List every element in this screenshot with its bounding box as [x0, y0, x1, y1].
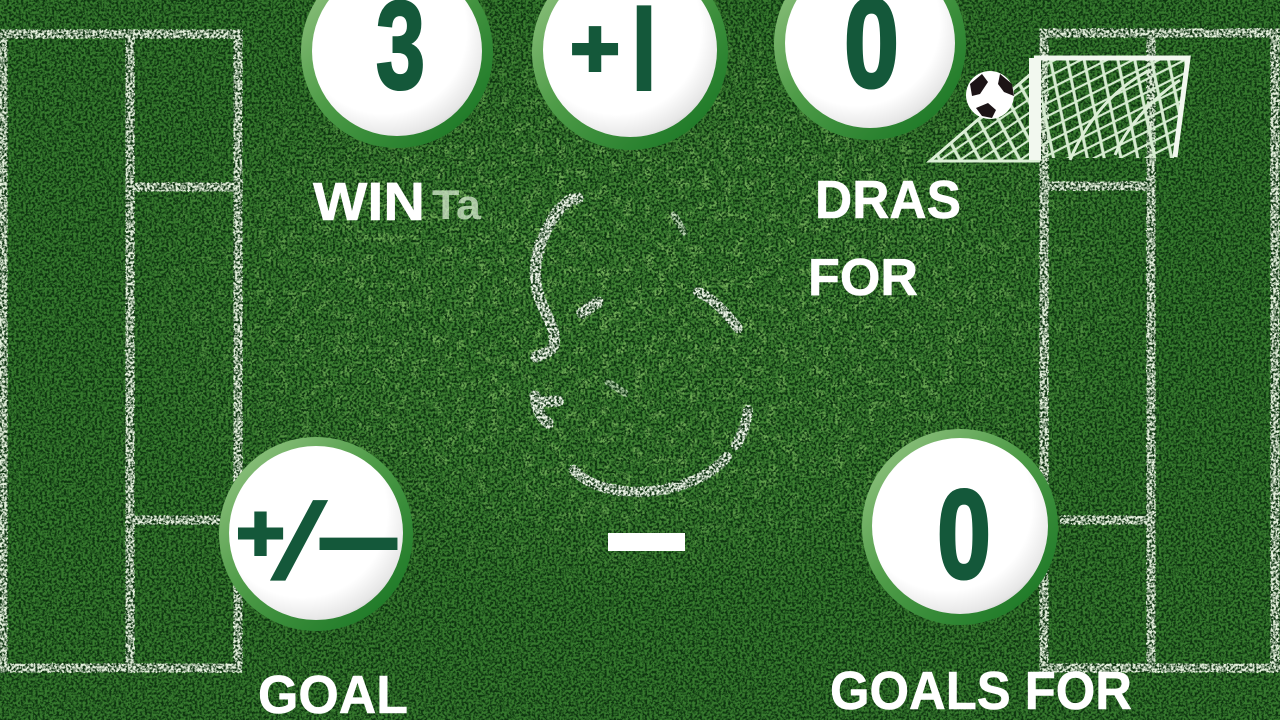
stat circle: goals for value: 0 — [937, 464, 991, 605]
left pitch markings — [0, 34, 238, 668]
stat circle: draws value — [774, 0, 966, 140]
stat circle: goals for value — [862, 429, 1058, 625]
label: goals for: GOALS FOR — [830, 661, 1132, 720]
label: for: FOR — [808, 249, 918, 307]
label: wins: Ta — [432, 181, 482, 228]
stat circle: goal difference value: — — [322, 497, 395, 580]
stat circle: plus one value: + — [570, 1, 620, 95]
label: wins — [313, 172, 482, 232]
icon: goal net — [930, 58, 1188, 161]
stat circle: goal difference value: / — [264, 483, 333, 599]
stat circle: wins value — [301, 0, 493, 148]
icon: soccer ball — [966, 71, 1014, 119]
right pitch markings — [1044, 33, 1280, 668]
stat circle: plus one value — [532, 0, 728, 150]
chalk scribble in centre — [535, 198, 748, 492]
stat circle: goal difference value — [219, 437, 413, 631]
label: draws: DRAS — [815, 170, 961, 230]
dash symbol — [608, 533, 685, 551]
label: wins: WIN — [313, 172, 425, 232]
stat circle: goal difference value: + — [236, 488, 285, 579]
